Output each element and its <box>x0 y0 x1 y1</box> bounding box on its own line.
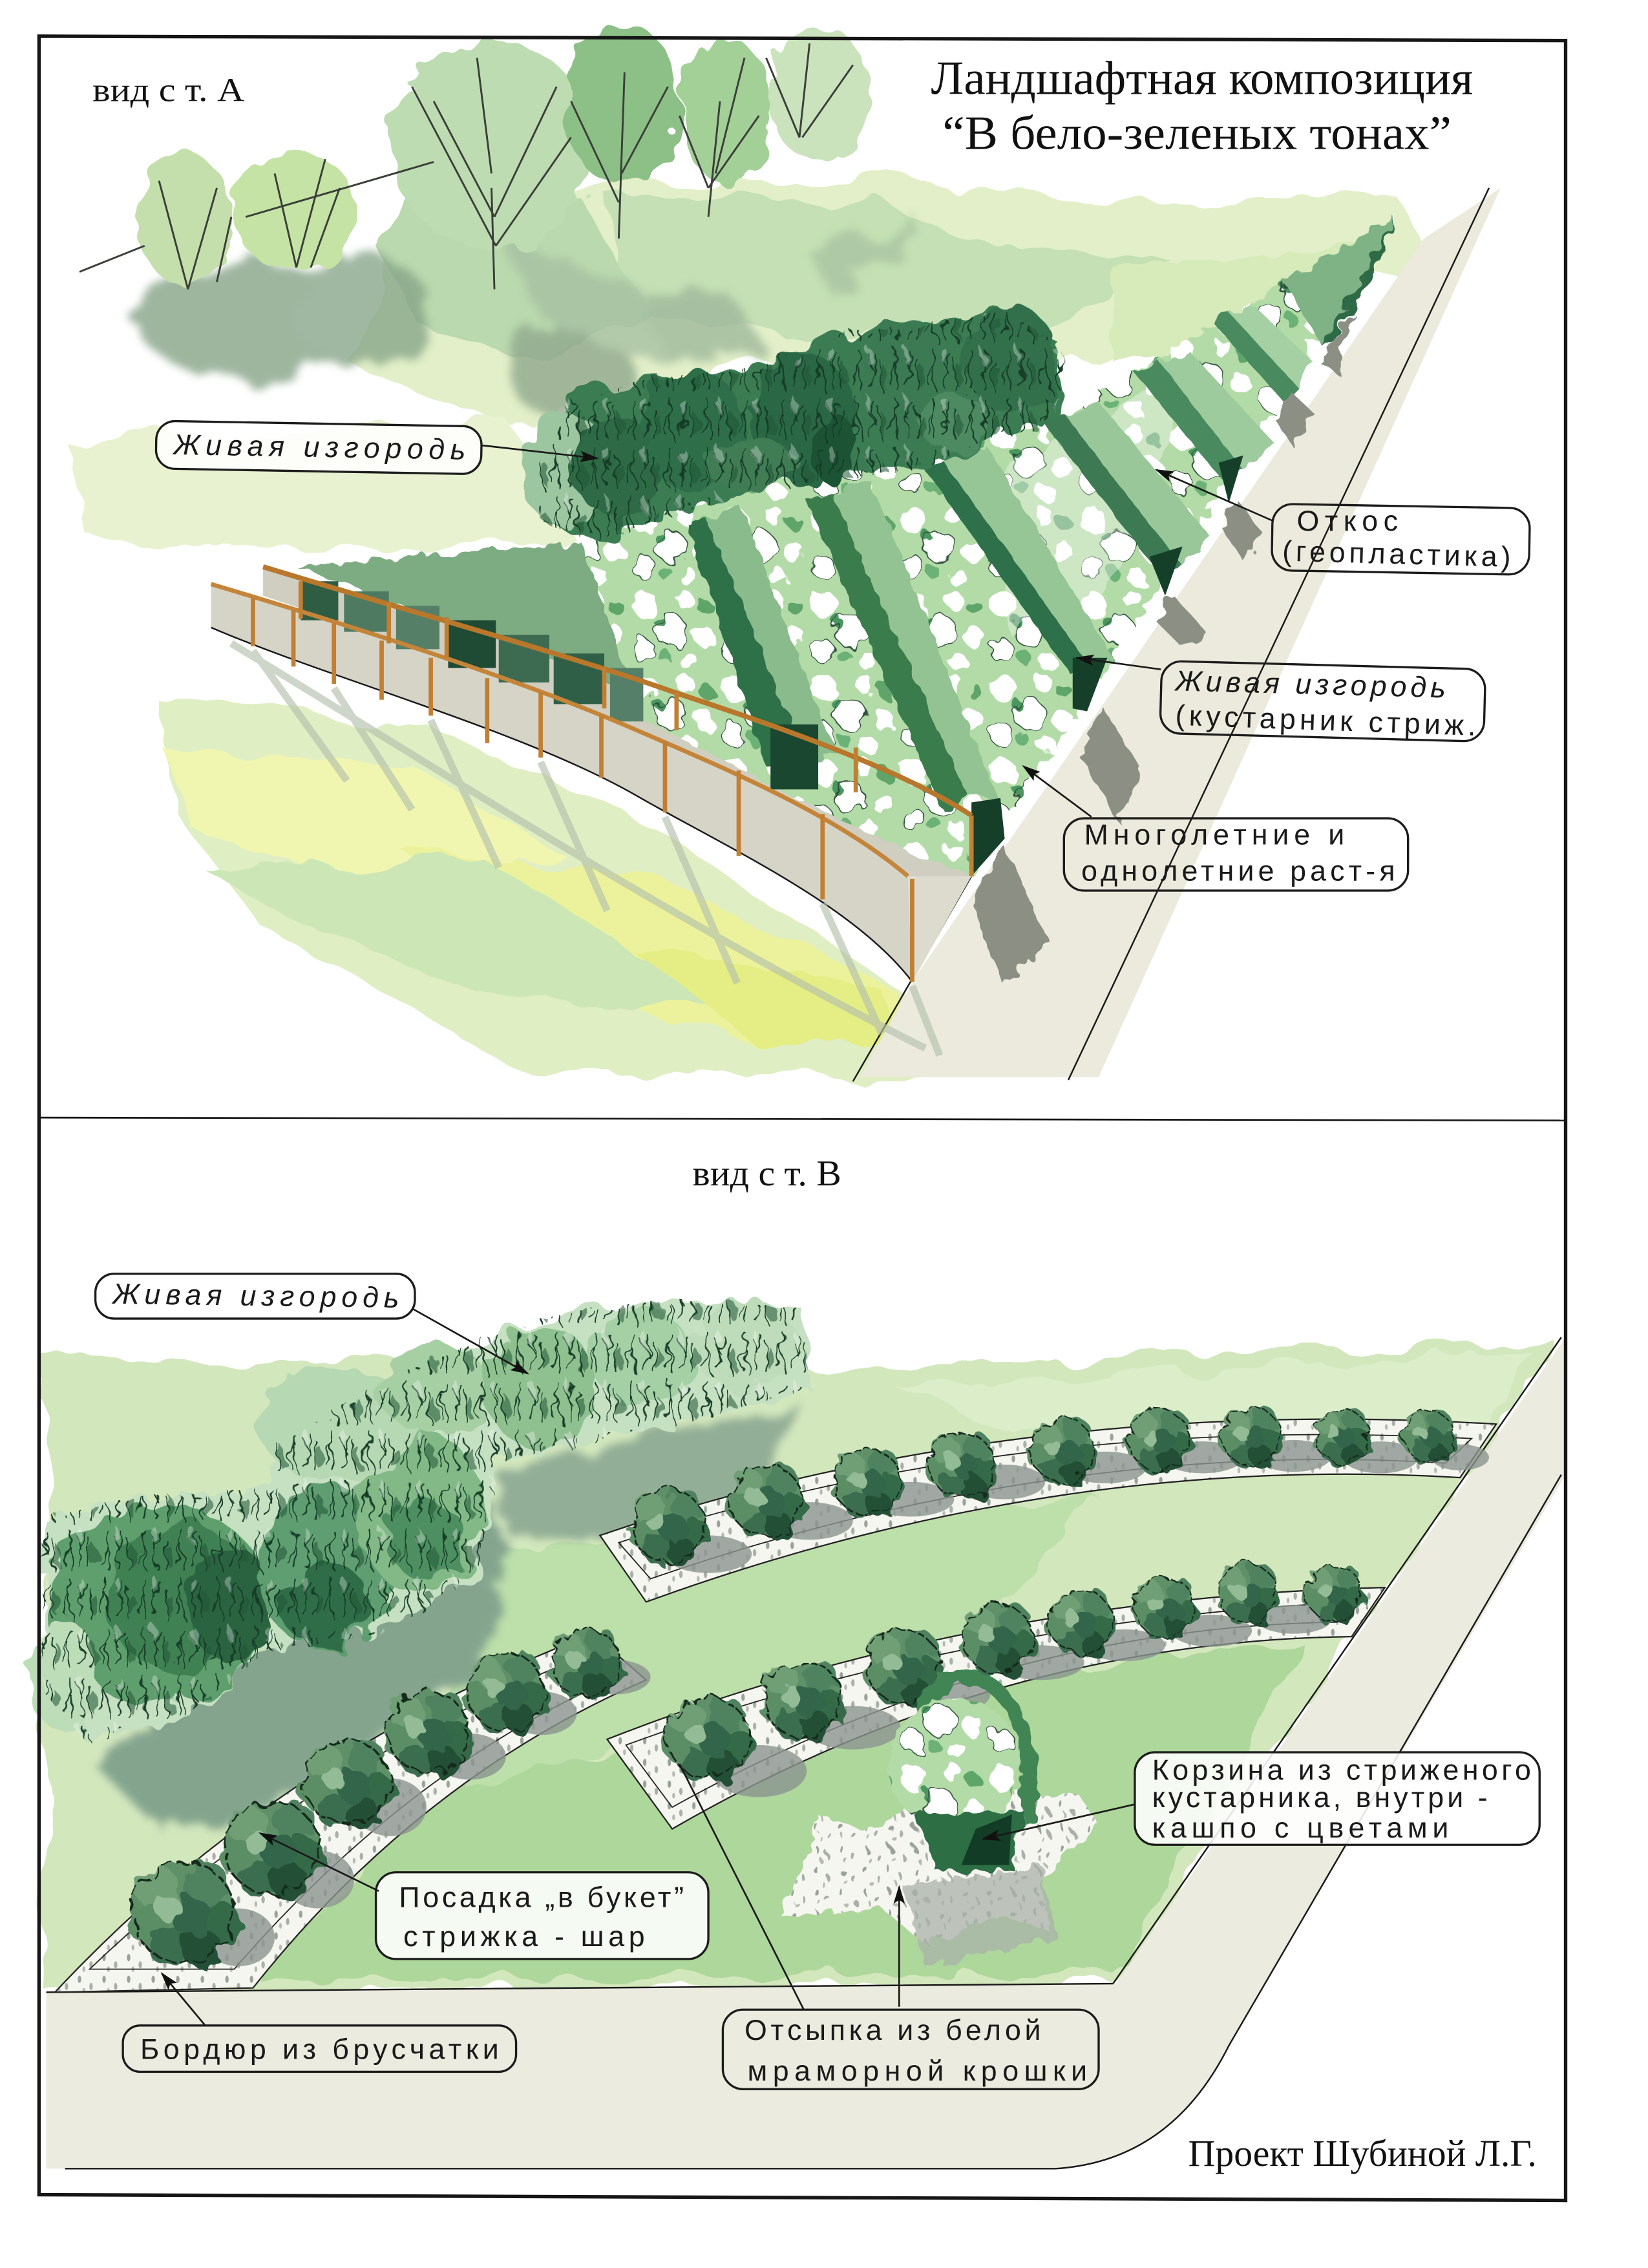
label: perennials: однолетние раст-я <box>1081 855 1395 887</box>
panel: view from point B <box>30 1154 1566 2174</box>
view label A: вид с т. А <box>92 72 244 109</box>
label: bouquet planting <box>260 1833 708 1959</box>
title: Ландшафтная композиция <box>931 51 1473 104</box>
label: slope: (геопластика) <box>1282 536 1511 573</box>
label: bouquet planting: стрижка - шар <box>403 1921 645 1953</box>
hedge foliage strokes <box>535 306 1062 542</box>
label: trimmed hedge <box>1077 658 1486 742</box>
grass triangle <box>297 544 646 700</box>
label: marble chips <box>679 1764 1099 2089</box>
top curved bed <box>600 1406 1496 1602</box>
label: slope: Откос <box>1296 505 1398 537</box>
tree shadows <box>137 224 925 419</box>
label: basket: кашпо с цветами <box>1152 1812 1448 1844</box>
lawn washes, upper garden <box>65 181 1424 549</box>
label: basket: кустарника, внутри - <box>1152 1782 1488 1814</box>
tree crowns <box>137 23 871 285</box>
trimmed hedge strips <box>686 217 1395 810</box>
middle curved bed <box>607 1564 1385 1829</box>
fence rails and posts <box>211 567 971 982</box>
dark fence panels <box>301 581 818 789</box>
label: bouquet planting: Посадка „в букет” <box>399 1881 684 1913</box>
gray hedge shadows <box>101 1410 810 1829</box>
basket of clipped shrubs <box>887 1677 1031 1874</box>
label: paving border: Бордюр из брусчатки <box>140 2033 499 2065</box>
dark hedge ends <box>971 456 1243 876</box>
hedges B <box>30 1298 810 1742</box>
view label B: вид с т. В <box>692 1154 841 1194</box>
flower bed slope <box>582 217 1398 876</box>
author credit: Проект Шубиной Л.Г. <box>1188 2132 1537 2174</box>
lawn washes, lower garden <box>152 694 925 1077</box>
label: hedge B: Живая изгородь <box>111 1278 399 1314</box>
tree trunks and branches <box>79 43 853 289</box>
trees <box>79 23 871 289</box>
middle row of clipped bushes <box>664 1564 1366 1783</box>
hedge B foliage strokes <box>43 1301 810 1742</box>
lawn <box>47 1344 1558 1992</box>
label: paving border <box>123 1973 516 2072</box>
label: slope <box>1156 470 1530 575</box>
label: perennials: Многолетние и <box>1084 819 1344 851</box>
top row of clipped bushes <box>628 1406 1457 1565</box>
label: basket <box>983 1752 1539 1845</box>
label: marble chips: Отсыпка из белой <box>745 2015 1041 2046</box>
title: “В бело-зеленых тонах” <box>942 106 1452 159</box>
label: hedge: Живая изгородь <box>172 429 466 466</box>
road B <box>47 1337 1566 2168</box>
marble chip patch <box>781 1793 1099 1966</box>
label: hedge <box>156 421 597 474</box>
title <box>918 50 1489 173</box>
panel: view from point A <box>65 23 1530 1081</box>
wall with fence <box>211 567 971 982</box>
label: perennials <box>1024 767 1408 891</box>
label: hedge B <box>96 1274 527 1373</box>
label: trimmed hedge: Живая изгородь <box>1174 665 1446 704</box>
road shadows of hedges <box>971 311 1353 986</box>
label: marble chips: мраморной крошки <box>747 2055 1087 2087</box>
label: trimmed hedge: (кустарник стриж. <box>1175 700 1477 742</box>
left row of clipped bushes <box>127 1628 625 1969</box>
left curved bed <box>55 1628 651 1992</box>
label: basket: Корзина из стриженого <box>1152 1755 1531 1786</box>
dark hedge row <box>523 306 1062 542</box>
post shadows on lawn <box>231 643 940 1055</box>
road <box>853 188 1501 1081</box>
